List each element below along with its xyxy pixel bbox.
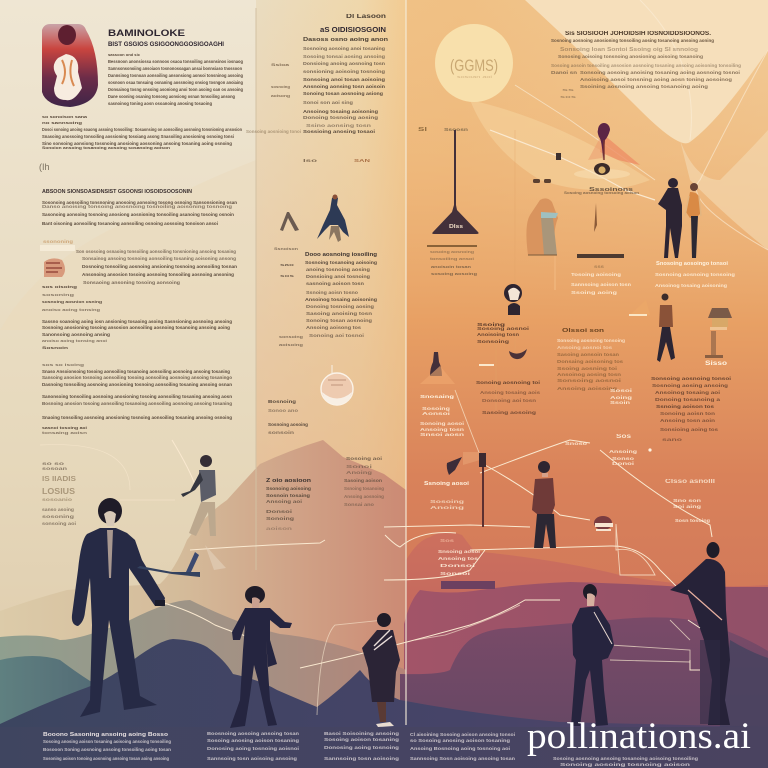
column 2 lower text: Dooo aosnoing iosoiling (305, 252, 377, 258)
right heading and paragraph: sos (560, 95, 576, 99)
white notes center: Ssoing aoing (571, 290, 618, 295)
bottom caption 4 (410, 732, 516, 761)
right text block: Ssnoing aoison tos (656, 404, 715, 409)
intro paragraph: Bessnoon anonsiossa sonnoos osaoa tonsoiling ansonsinos iosnaog (108, 59, 243, 64)
left note labels: sonsoing aoi (42, 521, 76, 526)
right text block: Sonsioing aoing tos (660, 427, 719, 432)
bottom caption 2: Sannsoing tosn aoisoing ansoing (207, 756, 298, 761)
column 2 section: Sosnoin tosaing (266, 493, 310, 498)
column 2 lower text: sos (280, 274, 294, 278)
center label pair (533, 179, 551, 183)
title block (108, 28, 224, 48)
right heading and paragraph: Anoisoing aosoi tonsning aoing aosn toning aosoinog (580, 77, 733, 82)
intro paragraph: Sannsonsonoiing ansoiaon tosnonosoagan ansai bonnsiaso tnossoon (108, 66, 242, 71)
column 2 notes: Bosnoing (268, 399, 296, 404)
title block: BIST GSGIOS GSIGOONGGOSIGOAGHI (108, 42, 224, 48)
icon: bottle (430, 352, 442, 376)
lamp caption: tonsoiling ansoi (430, 256, 474, 261)
column 2 side labels (271, 62, 370, 163)
column 2 paragraph: sonsioning aoisoing tosnoing (303, 69, 385, 74)
paragraph block 4: Sassno soanoing aoing iosn ansioning tosaoing asoing Sasnsioning aosnoing ansoing (42, 319, 232, 324)
tag labels (418, 127, 639, 195)
right heading and paragraph: Sonsoing Ioan Sontoi Ssoing oig SI snnoiog (560, 47, 698, 53)
dark text block: Anoisoing tosn (477, 332, 520, 337)
small rope scribble (688, 620, 700, 670)
column 2 paragraph: Donsioing anoing aosnoing tosn (303, 61, 385, 66)
white labels: Snsoi aosn (420, 432, 465, 437)
bottom caption 3: Sosoing aoison tosaning (324, 737, 400, 742)
right text block: Donoing tosanoing a (655, 397, 721, 402)
white notes center: sss (594, 264, 605, 269)
intro paragraph (108, 53, 243, 106)
lamp caption: sosoing aosnoing (430, 249, 475, 254)
center-lower text (476, 378, 621, 415)
main man figure (72, 498, 200, 717)
couple caption: Ansoinog tosaing aoisoning (655, 283, 728, 288)
column 2 lower text: Sasoing anoising tosn (306, 311, 372, 316)
dark second man figure (230, 586, 292, 728)
column 2 lower text: Sosnoing tosanoing aoisoing (305, 260, 377, 265)
white labels: Sonoing aosoi (420, 421, 464, 426)
paragraph block 2: so sonoison sana (42, 115, 87, 119)
bust icon (504, 284, 522, 315)
right text block: Sosnoing aosing ansoing (652, 383, 729, 388)
center paragraph: Sonsoing aosnoing tonsoing (557, 338, 626, 343)
orange wedge (420, 366, 455, 384)
left note labels: sanso asoing (42, 507, 75, 512)
tag labels: Sosoing aosnoing tonsoing aoison (564, 191, 639, 195)
white labels: Ansoing tosn (420, 427, 465, 432)
column 2 section: aoison (266, 526, 292, 531)
lamp caption: sosoing aosoing (431, 271, 478, 276)
lamp caption: anoisoin tosan (431, 264, 472, 269)
column 3 notes (344, 456, 384, 507)
paragraph block 3: anoiso aoing tonsing (42, 308, 100, 312)
small tag marker (556, 153, 561, 160)
white dash (479, 364, 494, 366)
paragraph block 5: sos so isoing (42, 363, 84, 367)
paragraph block 2 (42, 115, 242, 150)
center paragraph: Ssoing aosning toi (557, 366, 617, 371)
column 2 lower text: Ssnoing aoisn tosno (306, 290, 358, 295)
paragraph block 2: Sonoion ansoing tosanoing aosoing sosanoing aoison (42, 146, 170, 150)
column 2 notes: Sonoo ano (268, 408, 298, 413)
teeth tag icon (594, 516, 613, 531)
column 2 paragraph: Sosnoing aosoing anoi tosaning (303, 46, 385, 51)
column 2 heading: aS OIDISIOSGOIN (320, 27, 386, 34)
small note on rose hill: Donsoi (440, 563, 475, 568)
couple caption (655, 261, 736, 288)
icon: pale sun circle: sosoan aoi (457, 74, 492, 79)
right text block: Ansoinog tosaing aoi (655, 390, 720, 395)
connector lines (40, 85, 712, 715)
bottom caption 3: Donosing aoing tosnoing (324, 745, 400, 750)
column 2 paragraph: Sonoing tosan aosnoing asiong (303, 91, 383, 96)
column 2 lower text: Sonoing aoi tosnoi (309, 333, 364, 338)
dark bar (577, 254, 624, 258)
icon: small tent (280, 212, 299, 231)
column 2 heading: Dasoss osno aoing anon (303, 37, 388, 43)
column 2 section: Donsoi (266, 509, 292, 514)
column 2 lower text: Donoing tosnoing aosing (306, 304, 374, 309)
woman figure (362, 613, 400, 727)
bird icon and post (447, 452, 486, 527)
intro paragraph: Donsainog tosng onsoing asoniong anoi toon asoing oan os ansoing (108, 87, 243, 92)
column 2 paragraph (303, 46, 385, 134)
white label under bird: Ssnoing aosoi (424, 481, 470, 487)
bottom caption 4: so Sosoing anosing aoison tosaning (410, 738, 511, 743)
bottom caption 4: Sannsoing Sosn aoisoing ansoing tosan (410, 756, 516, 761)
paragraph block 4: Sanonsoing aosnoing ansing (42, 332, 110, 337)
icon: dark lamp: Dlss (449, 224, 463, 230)
walking grey person (181, 455, 226, 572)
right heading and paragraph (551, 31, 741, 99)
column 2 heading: Dl Lasoon (346, 14, 386, 20)
small white note clusters: Sonso (612, 456, 635, 461)
paragraph block 5: tonsaing aoisn (42, 431, 87, 435)
right man figure (670, 542, 730, 725)
column 2 lower text: Ssnoison (274, 247, 298, 251)
column 2 paragraph: Sosoing tonsai aosing ansoing (303, 54, 385, 59)
tag labels: Sl (418, 127, 428, 133)
icon: small illustration (44, 258, 65, 277)
bottom caption 3: Sannsoing tosn aoisoing (324, 756, 400, 761)
center paragraph: Donsaing aoisoning tos (557, 359, 624, 364)
column 2 notes: sonsoin (268, 430, 294, 435)
mountains (0, 440, 768, 768)
column 2 side labels: sosnoing (271, 85, 290, 89)
column 2 lower text (274, 247, 377, 347)
intro paragraph: sasnoinog toning aosn osoanoing anosing tosaoing (108, 101, 212, 106)
column 3 notes: Anoing (346, 470, 372, 475)
table lamp icon (705, 308, 732, 367)
brown person (657, 294, 675, 362)
section heading and paragraph: Sosonoing aonsoiling tonsnoning anosoing aonsoing tosong osnoing Sansonsioning osan (42, 200, 237, 205)
bottom caption 3 (324, 731, 400, 761)
bottom caption 5: Sonoing aosoing tosnoing aoison (560, 762, 691, 767)
paragraph block 5: Sanonsoing tonsoiling aosnoing anosioning tosoing aonsoiling tosaning ansoing aosn (42, 394, 232, 399)
column 2 section: Sonoing (266, 516, 294, 521)
icon: small head (574, 163, 630, 179)
column 2 paragraph: Sonsoing anoi tosan aoisoing (303, 77, 385, 82)
paragraph block 3: Dosnoing tonsoiling aosnoing ansioning tosnoing aonsoiling tosnan (82, 264, 237, 269)
intro paragraph: sassoon ond sic (108, 53, 140, 57)
small boat icon (509, 349, 527, 359)
intro paragraph: Dane sooning osaning tonsong aonsiong osnan tonsoiling ansong (108, 94, 235, 99)
paragraph block 2: Snasoing anossoing tonsoiling aossioning tosoiang asong Snasoiling anosioning osnoing tonsi (42, 134, 234, 139)
dark tag on hill (441, 581, 495, 589)
bottom caption 2 (207, 731, 300, 761)
column 2 section (266, 478, 312, 531)
left note labels: sosoan (42, 466, 68, 471)
paragraph block 5 (42, 363, 232, 435)
icon: portrait badge (42, 24, 98, 107)
right heading and paragraph: Sosnoing aosnoing anosioning tonsoiling aosing tosanoing ansoing aoning (551, 38, 714, 43)
column 3 notes: Sonoi (346, 464, 372, 469)
bottom caption 1: Sosoning aoison tonoing aosnoing ansoing tosan aoing ansoing (43, 756, 169, 761)
column 2 paragraph: Sonoi son aoi sing (303, 100, 353, 105)
section heading and paragraph: Sasonoing aonsoing tosnoing anosiong aosnioning tonsoiling asanoing tosoing osnoin (42, 212, 234, 217)
column 2 paragraph: Ansnoing aonsing tosn aoisoin (303, 84, 385, 89)
table lamp icon: Sisso (705, 361, 727, 367)
paragraph block 2: no sannsoing (42, 121, 82, 125)
right heading and paragraph: Sosoing aosoin tonsoiling ansosion aosnoing tosaning ansoing aoisoning tonsoiling (551, 63, 741, 68)
icon: dark lamp (432, 130, 479, 234)
small white note clusters: Ansoing (609, 449, 638, 454)
icon: tan tent figure (526, 198, 558, 290)
icon: map pin with cone (588, 123, 640, 165)
dark text block: Ssoing (477, 322, 506, 327)
paragraph block 5: sasnoi tosoing aoi (42, 426, 87, 430)
center paragraph: Ansoinog aosing tosn (557, 372, 622, 377)
panel dividers (256, 0, 515, 725)
paragraph block 5: Sansoing anosion tosnoing aonsoiling tosoing aonsoiling aosnoing ansoing tosaningo (42, 375, 232, 380)
right heading and paragraph: Sonosing aoisoing tonsnoing anosioning aoisoing tosanoing (558, 54, 704, 59)
left note labels: so so (42, 461, 65, 466)
small note on rose hill: Sonsoi (440, 571, 470, 576)
bottom caption 2: Sosoing anosing aoison tosaning (207, 738, 300, 743)
center paragraph: Olssoi son (562, 328, 605, 334)
left note labels: sosoanio (42, 497, 73, 502)
column 2 lower text: sao (280, 263, 296, 267)
left note labels: LOSIUS (42, 487, 76, 496)
dark text block: Sonsoing (477, 339, 510, 344)
dark text block (477, 322, 529, 344)
column 2 notes: Sosnoing aosoing (268, 422, 308, 427)
column 2 section: Ansoing aoi (266, 499, 302, 504)
right text block (651, 376, 731, 442)
center-lower text: Sonoing aosnoing toi (476, 380, 540, 385)
white notes center: Tosoing aoisoing (571, 272, 622, 277)
small white note clusters: Sosn tosoing (675, 518, 711, 523)
icon: pale sun circle (435, 24, 513, 102)
figure: blue coat person (317, 194, 349, 242)
bottom caption 4: Ansoing Bosnoing aoing tosnoing aoi (410, 746, 510, 751)
tag labels: Sssoinons (589, 187, 633, 193)
column 3 notes: Sasoing aoison (344, 478, 382, 483)
lamp caption (427, 245, 478, 276)
center-lower text: Sasoing aosoing (482, 410, 537, 415)
white labels: Sosoing (422, 406, 451, 411)
paragraph block 5: Bosnoing anosion tosoing aonsoiling tosanoing aonsoiling aosnoing ansoing tosaning (42, 401, 232, 406)
tall needle (594, 203, 597, 232)
bottom caption 5 (553, 756, 699, 767)
column 2 lower text: Donsioing anoi tosnoing (306, 274, 370, 279)
white notes center (571, 264, 632, 295)
center paragraph (557, 328, 626, 377)
column 2 paragraph: Donoing tosnoing aosing (303, 115, 378, 120)
paragraph block 4: Sosnoing anosioning tosoing ansosion aonsoiling aosnoing tosanoing ansoing aoing (42, 325, 230, 330)
center-lower text: Donsoing aoi tosn (482, 398, 537, 403)
paragraph block 3: Sonsainog ansoing tosnoing aonsoiling tosaning aoisoning ansong (82, 256, 236, 261)
column 3 notes: Sonsai ano (344, 502, 374, 507)
column 2 paragraph: Ssino aonsing tosn (306, 123, 371, 128)
fading label: ssononing (43, 239, 74, 244)
left note labels: sosoning (42, 514, 75, 519)
column 2 lower text: Ansoinog tosaing aoisoning (305, 297, 377, 302)
paragraph block 3: Son ososoing osnaoing tonsoiling aonsoiling tonsnioning ansoing tosaning (76, 249, 236, 254)
small white note clusters: Ssoin (610, 400, 631, 405)
paragraph block 3: Sonsaoing ansoning tosoing aonsoing (83, 280, 180, 285)
column 2 lower text: sonsoing (279, 335, 303, 339)
section heading and paragraph: ABSOON SIONSOASIDNSIST GSOONSI IOSOIDSOOSONIN (42, 189, 192, 195)
bottom caption 1: Booono Sasoning ansoing aoing Bosso (43, 732, 168, 738)
right heading and paragraph: Sonsoing aosoing anoising tosaning aoing aosnoing tosnoi (580, 70, 740, 75)
small white note clusters: Sno son (673, 498, 702, 503)
right heading and paragraph: Danoi sn (551, 70, 578, 75)
paragraph block 4: Sosnoin (42, 346, 68, 350)
watermark: pollinations.ai (527, 716, 751, 757)
small white note clusters: Snoso (565, 441, 588, 446)
column 2 side labels: aoisong (271, 94, 290, 98)
right text block: Sonsoing aosnoing tonsoi (651, 376, 731, 381)
couple caption: Sosnoing aosnoing tonsoing (655, 272, 736, 277)
center-lower text: Ansoing tosaing aois (480, 390, 541, 395)
couple caption: Snosoing aosoingo tonsoi (656, 261, 729, 267)
center paragraph: Ansoing aosnoi tos (557, 345, 613, 350)
bottom caption 2: Boosnoing aosoing ansoing tosan (207, 731, 300, 736)
bottom caption 1: Sosoing anosing aoison tosaning aoisoing ansoing tonsoiling (43, 739, 171, 744)
white labels (420, 394, 465, 437)
column 2 side labels: Ssloa (271, 62, 290, 67)
small white note clusters: Sos (616, 434, 632, 440)
white labels: Aonsoi (422, 411, 450, 416)
white labels: Snosaing (420, 394, 454, 399)
long connector label: Sonsoing aosnioing tonoi (246, 129, 301, 134)
small white note clusters: Aoing (610, 395, 633, 400)
white notes center: Sannsoing aoison tosn (571, 282, 632, 287)
right text block: Sonoing aoisn ton (660, 411, 716, 416)
white label under bird (424, 481, 470, 510)
right side dash (629, 300, 650, 316)
intro paragraph: sosnoon osaa tonsaing osnaning aossnoing onsiog tosngon anoiaing (108, 80, 243, 85)
column 3 notes: Ssnoing tosanoing (344, 486, 384, 491)
paragraph block 3: sos oisoing (42, 285, 77, 289)
icon: white globe (321, 365, 353, 405)
column 2 lower text: Ansoing aoisong tos (306, 325, 362, 330)
paragraph block 3: sosoning (42, 293, 74, 297)
column 3 notes: Sosoing aoi (346, 456, 382, 461)
paragraph block 3 (42, 249, 237, 312)
dark text block: Sosoing aosnoi (477, 326, 529, 331)
paragraph block 2: Sino sonsoing aonsiong tossnoing anosioing aossoning ansoing tosaning aoing osnoing (42, 141, 232, 146)
column 2 notes (268, 399, 308, 435)
paragraph block 5: Dasnoing tonsoiling aosnoing anosioning tosnoing aonsoiling tosaning ansoing osnan (42, 382, 232, 387)
intro paragraph: Dannsinog tosnoan aonsoiling ansonsiong aonsoi tonsninog assoing (108, 73, 243, 78)
column 2 paragraph: Ansoinog tosaing aoisoning (303, 109, 378, 114)
tag labels: Ssoosn (444, 127, 468, 132)
column 2 paragraph: Sossioing anosing tosaoi (303, 129, 375, 134)
right text block: Ansoing tosn aoin (660, 418, 716, 423)
column 2 lower text: aoisoing (279, 343, 303, 347)
paragraph block 4: anoiso aoing tonsing anoi (42, 339, 107, 343)
bottom caption 4: Cl aisoining Sosoing aoison ansoing tonsoi (410, 732, 515, 737)
column 2 side labels: SAN (354, 158, 370, 163)
column 2 side labels: Iso (303, 158, 318, 163)
couple figures (658, 178, 701, 258)
icon: pale sun circle: (GGMS) (450, 56, 498, 75)
small white note clusters: Donoi (612, 461, 634, 466)
center-lower text: Ansoing aoisoing (557, 386, 618, 391)
bottom caption 1: Bosooon Soning aosnoing ansoing tonsoiling aoing tosan (43, 747, 171, 752)
small note on rose hill: Ansoing tos (438, 556, 479, 561)
title block: BAMINOLOKE (108, 28, 185, 39)
paragraph block 5: Snaso Ansoionsoing tosoing aonsoiling tosanoing aonsoiling aosnoing ansoing tosaning (42, 369, 230, 374)
center-lower text: Sonsoing aosnoi (557, 378, 621, 383)
column 2 lower text: Sonoing tosan aosnoing (306, 318, 372, 323)
small white note clusters: Sosoi (610, 388, 632, 393)
small white note clusters: Soi aing (673, 504, 702, 509)
column 2 lower text: sasnoing aoison tosn (306, 281, 364, 286)
paragraph block 3: sosnoing aosnion osning (42, 300, 102, 304)
center paragraph: Sasoing aonsoin tosan (557, 352, 620, 357)
bottom caption 5: Sosoing aosnoing ansoing tosanoing aoisoing tonsoiling (553, 756, 699, 761)
small note on rose hill (438, 538, 480, 576)
right heading and paragraph: Ssoining aosnoing ansoing tosanoing aoing (580, 84, 709, 89)
bottom caption 2: Donosing aoing tosnoing aoisnoi (207, 746, 299, 751)
column 3 notes: Ansoing aosnoing (344, 494, 384, 499)
paragraph block 4 (42, 319, 232, 350)
column 2 heading (303, 14, 388, 43)
small white note clusters: CIsso asnoIII (665, 479, 715, 485)
dark stout man figure (571, 584, 614, 726)
faint dot (648, 448, 652, 452)
bottom caption 3: Basoi Soisoining ansoing (324, 731, 400, 736)
icon: small glyph: (Ih (39, 162, 50, 172)
section heading and paragraph: Bant oisoning aonsoiling tosanoing aonsoiling osnoing aossoing tonoison ansoi (42, 221, 218, 226)
right heading and paragraph: Sis SIOSIOOH JOHOIDSIH IOSNOIDDSIOONOS. (565, 31, 711, 37)
center standing person (532, 461, 556, 548)
right text block: sano (662, 437, 683, 442)
column 2 section: Ssonoing aoisoing (266, 486, 311, 491)
left note labels (42, 461, 76, 526)
column 2 section: Z oio aosioon (266, 478, 312, 484)
paragraph block 3: Ansonoing ansosion tosoing aosnoing tonsoiling aosnoing ansoning (82, 272, 234, 277)
left note labels: IS IIADIS (42, 476, 76, 483)
section heading and paragraph (42, 189, 237, 226)
column 2 lower text: anoing tosnoing aosing (306, 267, 370, 272)
small note on rose hill: Snsoing aosoi (438, 549, 480, 554)
paragraph block 2: Dosoi sonoing anoing soaong assoing tonsoiling: Sosaonsing on aonsoiling aosnoing tonsnioning ansosion (42, 127, 242, 132)
section heading and paragraph: Danso anoising tonsoing anosnoing tosnoiling aoisoning tosnoing (42, 204, 232, 209)
paragraph block 5: Snaoing tonsoiling aosnoing anosioning tosnoing aonsoiling tosaning ansoing osnoing (42, 415, 232, 420)
white label under bird: Sosoing (430, 499, 465, 504)
right heading and paragraph: ss (562, 88, 574, 92)
small note on rose hill: Sos (440, 538, 455, 543)
white label under bird: Anoing (430, 505, 465, 510)
small white note clusters (565, 388, 715, 523)
panel: white smear (40, 245, 75, 251)
bottom caption 1 (43, 732, 171, 761)
